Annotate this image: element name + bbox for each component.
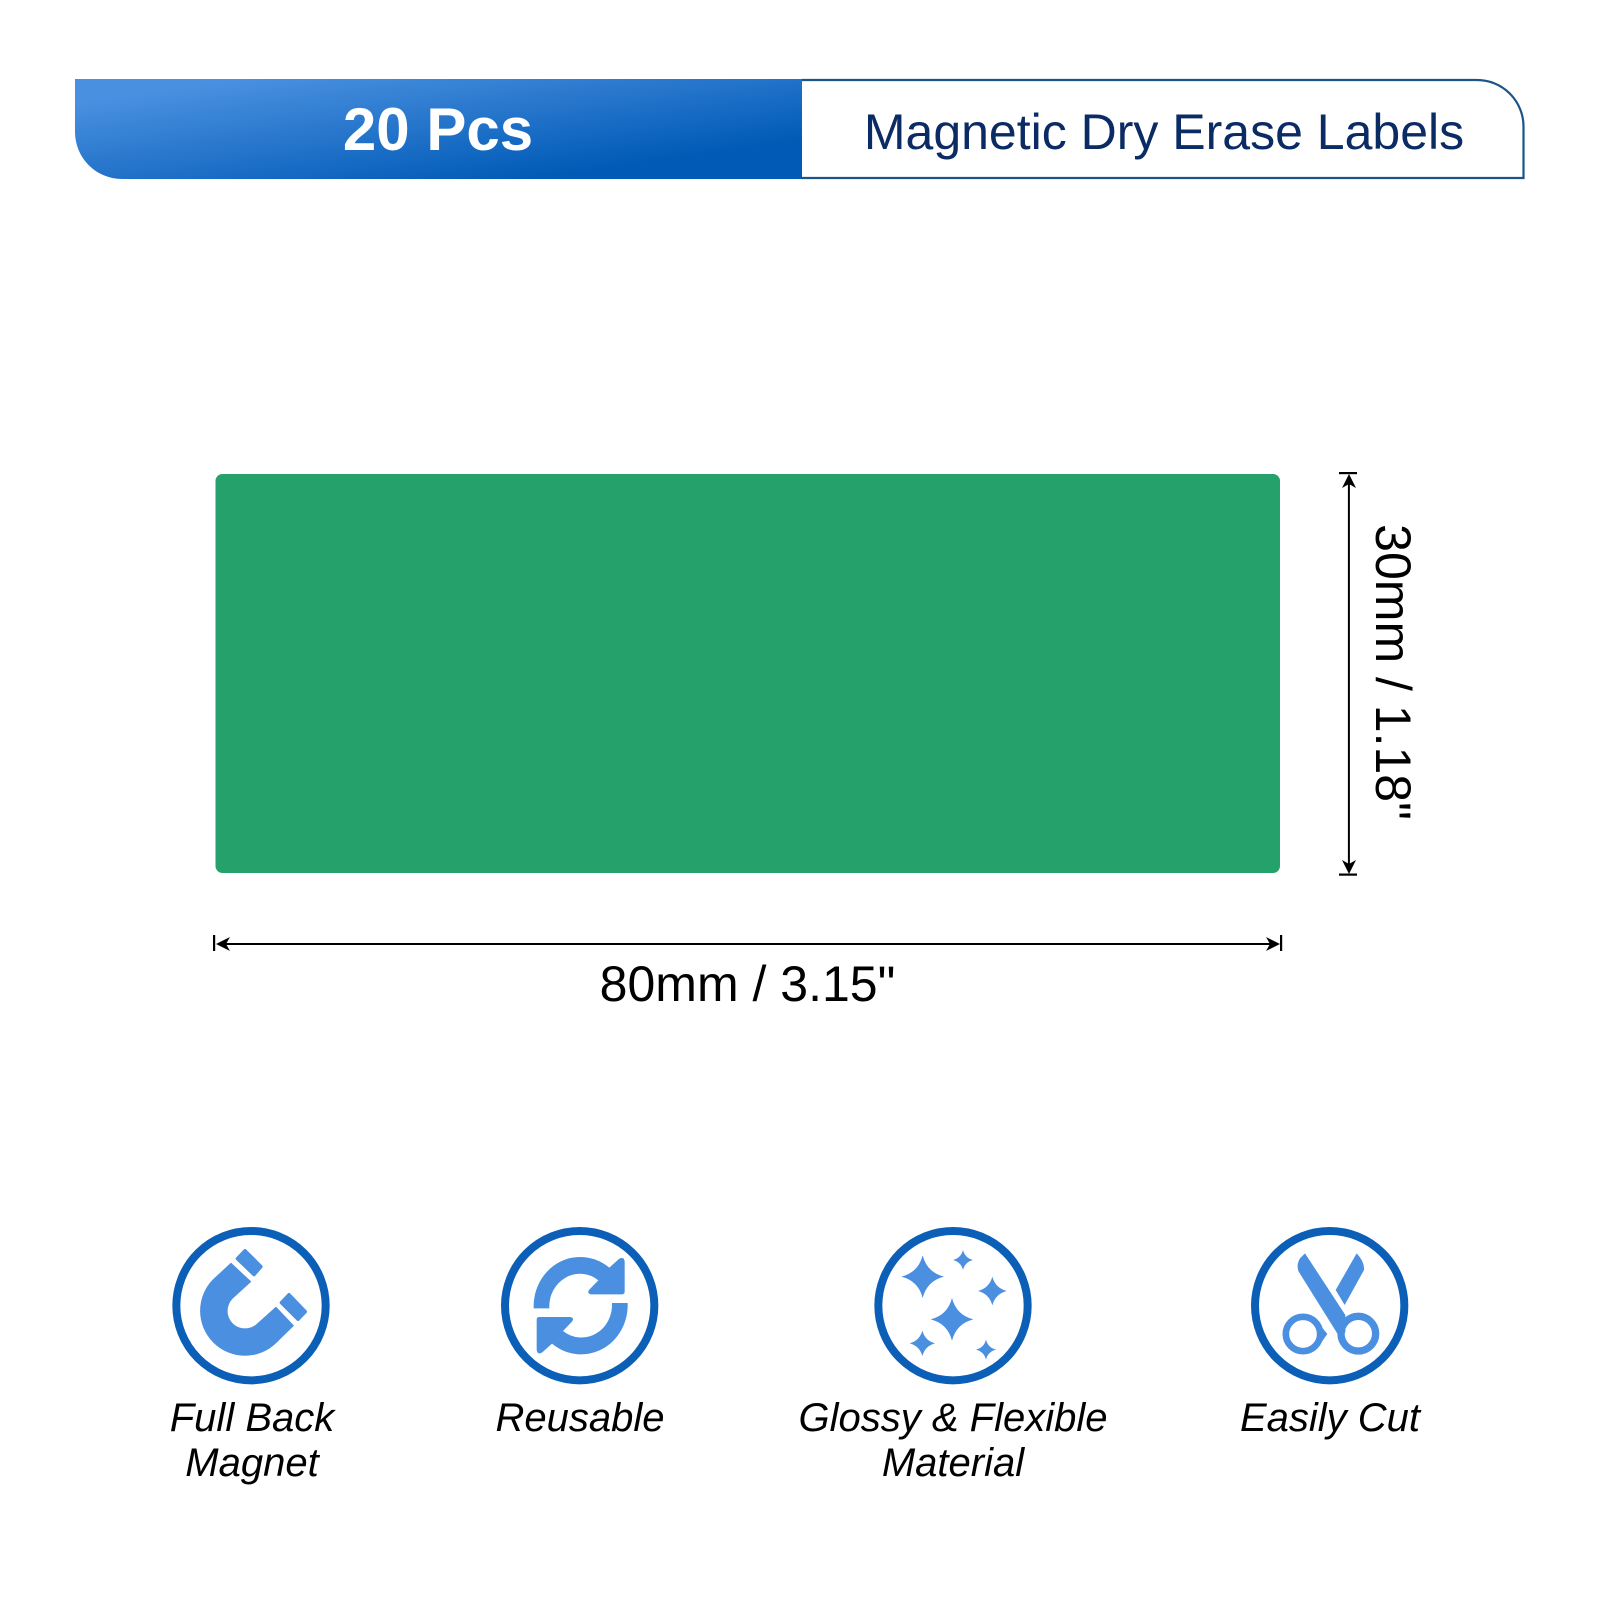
icon: magnet xyxy=(172,1227,330,1384)
feature: reusable xyxy=(495,1231,665,1440)
caption: easily cut: Easily Cut xyxy=(1240,1396,1422,1440)
feature: full back magnet xyxy=(170,1231,336,1485)
caption: full back magnet: Magnet xyxy=(185,1441,321,1485)
caption: reusable: Reusable xyxy=(495,1396,665,1440)
caption: glossy and flexible material: Glossy & Flexible xyxy=(799,1396,1107,1440)
header quantity block xyxy=(75,79,802,179)
width dimension arrow xyxy=(213,935,1282,951)
feature: easily cut xyxy=(1240,1231,1422,1440)
icon: recycle arrows xyxy=(501,1227,658,1384)
header title block xyxy=(802,80,1524,178)
icon: sparkles xyxy=(874,1227,1032,1384)
caption: glossy and flexible material: Material xyxy=(882,1441,1025,1485)
height label: 30mm / 1.18" xyxy=(1365,524,1421,820)
icon: scissors xyxy=(1251,1227,1408,1384)
caption: full back magnet: Full Back xyxy=(170,1396,336,1440)
feature: glossy and flexible material xyxy=(799,1231,1107,1485)
header banner xyxy=(75,79,1524,179)
header quantity block: 20 Pcs xyxy=(343,96,533,163)
width label: 80mm / 3.15" xyxy=(600,956,895,1012)
green magnetic label xyxy=(216,474,1280,873)
height dimension arrow xyxy=(1339,472,1357,876)
header title block: Magnetic Dry Erase Labels xyxy=(864,104,1464,160)
